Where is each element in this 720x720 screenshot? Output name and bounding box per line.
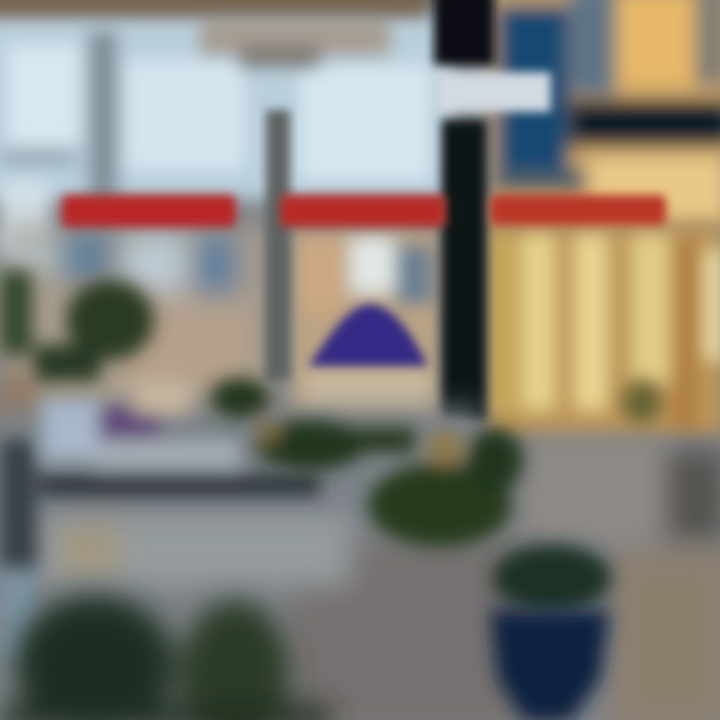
lower left storefront (0, 225, 270, 430)
red awnings (62, 195, 666, 227)
white sign on pole (436, 72, 551, 112)
bottom left plants (0, 595, 330, 720)
top beam: brown ceiling (0, 0, 430, 66)
cafe table with purple accent (0, 380, 320, 660)
potted plant: navy pot (490, 610, 610, 720)
side pillar (266, 110, 290, 380)
plants: left tree (0, 270, 154, 381)
potted plant: foliage (492, 544, 612, 612)
black central pole (434, 0, 494, 420)
right upper facade: blue panel and warm window (490, 0, 720, 230)
upper windows: pale glass (0, 10, 450, 250)
purple dome (308, 304, 428, 366)
center storefront window (290, 228, 440, 423)
plants: center shrubs (210, 378, 662, 547)
ground and lower terrace (0, 410, 720, 720)
right glowing yellow windows (485, 225, 720, 435)
